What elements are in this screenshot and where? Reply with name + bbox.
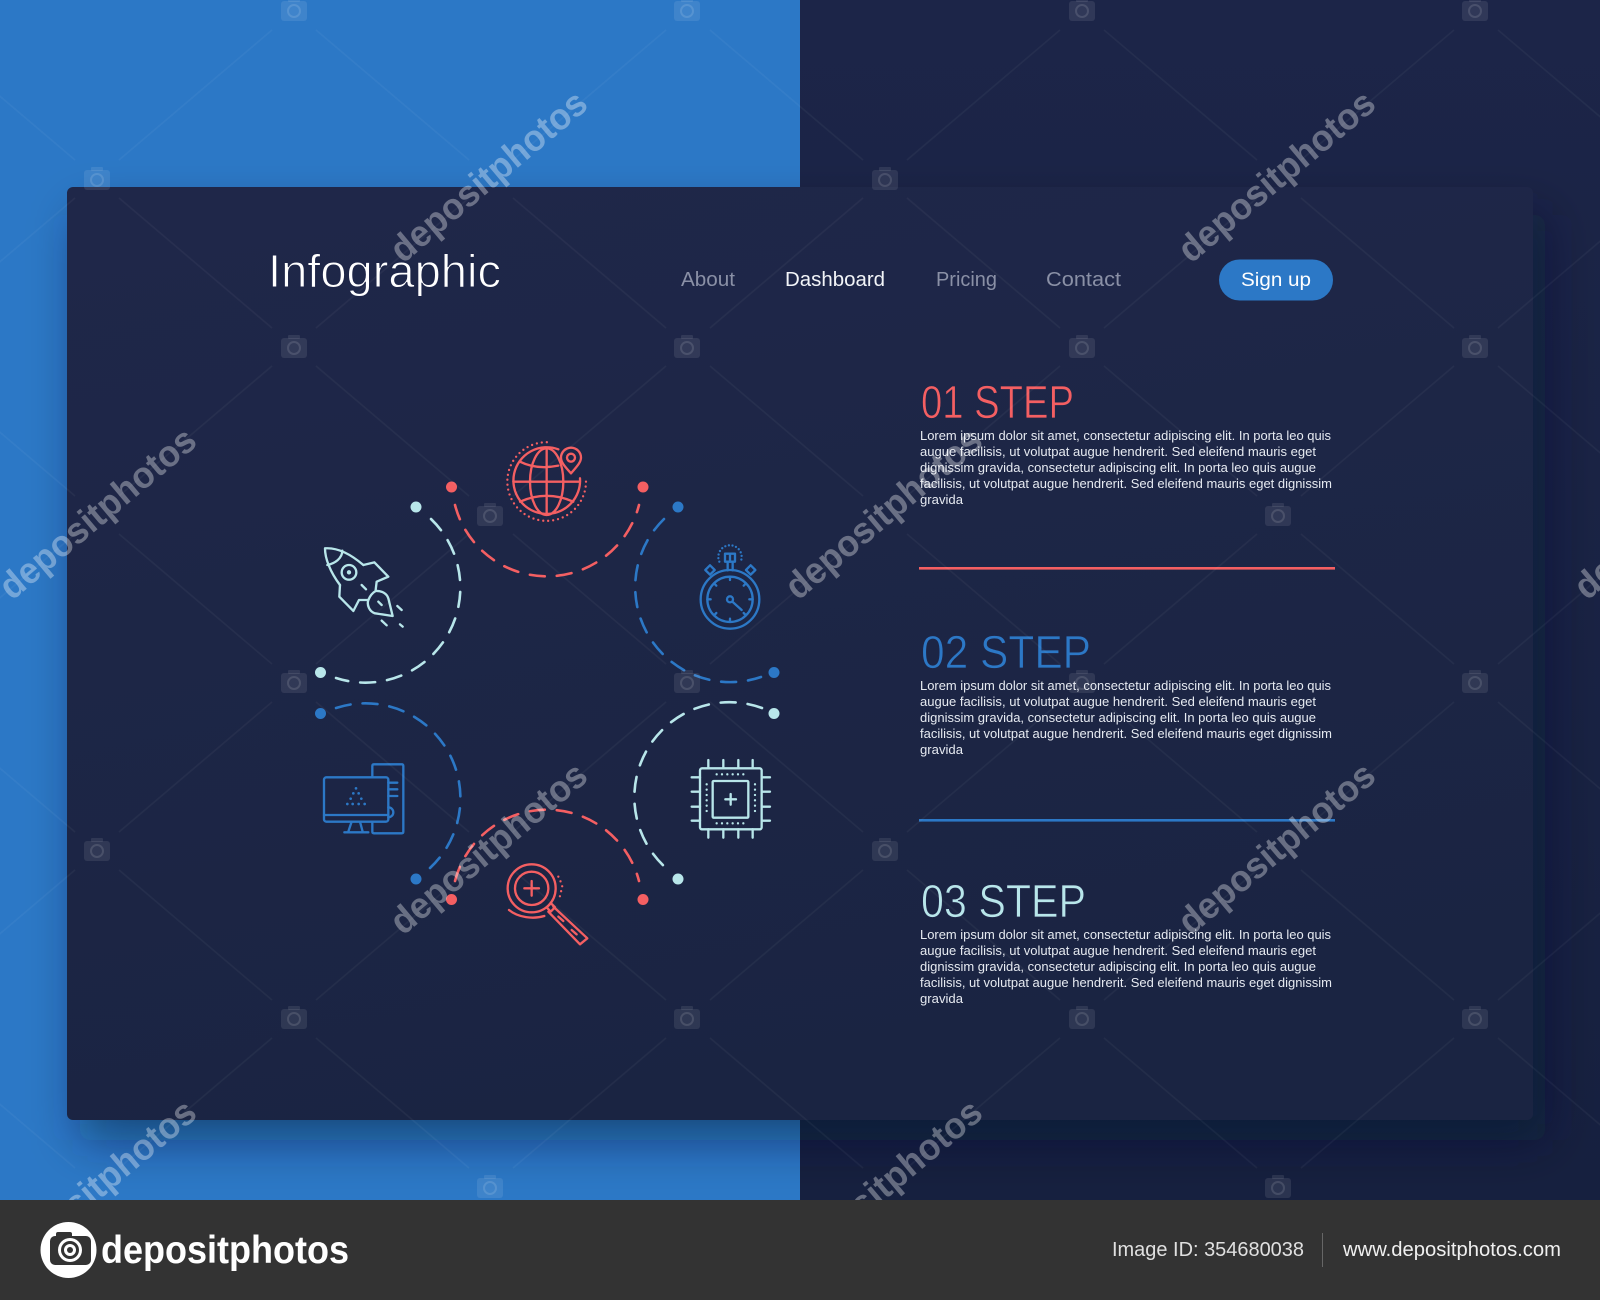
step 3 body text: augue facilisis, ut volutpat augue hendrerit. Sed eleifend mauris eget [920, 943, 1316, 958]
step 3 body text: dignissim gravida, consectetur adipiscing elit. In porta leo quis augue [920, 959, 1316, 974]
step 3 [920, 875, 1332, 1006]
image id: Image ID: 354680038 [1112, 1239, 1304, 1261]
icon: desktop computer [324, 764, 403, 833]
step 1 heading: 01 STEP [921, 376, 1074, 428]
steps column [919, 376, 1335, 1006]
footer logo wordmark: depositphotos [101, 1229, 349, 1272]
sign up button [1219, 260, 1333, 300]
step 3 body text: facilisis, ut volutpat augue hendrerit. Sed eleifend mauris eget dignissim [920, 975, 1332, 990]
watermark overlay: depositphotos [777, 419, 990, 607]
background: dark right block [800, 0, 1600, 1200]
watermark overlay: depositphotos [1170, 82, 1383, 270]
nav: dashboard: Dashboard [785, 269, 885, 291]
website url: www.depositphotos.com [1342, 1239, 1561, 1261]
watermark overlay: depositphotos [1170, 754, 1383, 942]
nav: pricing: Pricing [936, 269, 997, 291]
step 1 [919, 376, 1335, 570]
step 3 body text: gravida [920, 991, 964, 1006]
step 1 body text: augue facilisis, ut volutpat augue hendrerit. Sed eleifend mauris eget [920, 444, 1316, 459]
step 1 body text: gravida [920, 492, 964, 507]
icon: stopwatch [701, 545, 759, 629]
header [268, 245, 1333, 300]
step 1 body text [920, 428, 1332, 507]
nav: contact: Contact [1046, 269, 1121, 291]
step 2 body text [920, 678, 1332, 757]
step 2 [919, 626, 1335, 822]
arc: lower left blue [315, 703, 460, 884]
step 2 body text: facilisis, ut volutpat augue hendrerit. Sed eleifend mauris eget dignissim [920, 726, 1332, 741]
step 2 body text: augue facilisis, ut volutpat augue hendrerit. Sed eleifend mauris eget [920, 694, 1316, 709]
step 2 body text: Lorem ipsum dolor sit amet, consectetur adipiscing elit. In porta leo quis [920, 678, 1331, 693]
footer bar [0, 1200, 1600, 1300]
watermark overlay: depositphotos [777, 1091, 990, 1279]
background: blue left block [0, 0, 800, 1200]
arc: top red [446, 482, 648, 576]
step 2 divider [919, 819, 1335, 822]
step 1 body text: Lorem ipsum dolor sit amet, consectetur adipiscing elit. In porta leo quis [920, 428, 1331, 443]
icon: microchip [692, 760, 770, 838]
arc: upper right blue [635, 502, 780, 682]
watermark overlay: depositphotos [382, 754, 595, 942]
watermark overlay: depositphotos [382, 82, 595, 270]
step 1 divider [919, 567, 1335, 570]
step 2 body text: gravida [920, 742, 964, 757]
nav: about: About [681, 269, 735, 291]
step 3 heading: 03 STEP [921, 875, 1086, 927]
sign up button: Sign up [1241, 270, 1311, 291]
icon: globe with pin [507, 442, 586, 521]
arc: upper left pale [315, 502, 460, 683]
arc: lower right pale [634, 702, 780, 884]
step 2 body text: dignissim gravida, consectetur adipiscing elit. In porta leo quis augue [920, 710, 1316, 725]
step 3 body text: Lorem ipsum dolor sit amet, consectetur adipiscing elit. In porta leo quis [920, 927, 1331, 942]
title: Infographic [268, 245, 501, 297]
card shadow [80, 215, 1545, 1140]
navigation [681, 269, 1121, 291]
step 1 body text: dignissim gravida, consectetur adipiscing elit. In porta leo quis augue [920, 460, 1316, 475]
step 2 heading: 02 STEP [921, 626, 1091, 678]
icon: magnifier [508, 864, 587, 944]
radial dashed diagram [315, 442, 780, 944]
step 3 body text [920, 927, 1332, 1006]
arc: bottom red [446, 810, 648, 905]
main card panel [67, 187, 1533, 1120]
icon: rocket [325, 548, 403, 627]
step 1 body text: facilisis, ut volutpat augue hendrerit. Sed eleifend mauris eget dignissim [920, 476, 1332, 491]
footer logo icon [40, 1222, 96, 1278]
